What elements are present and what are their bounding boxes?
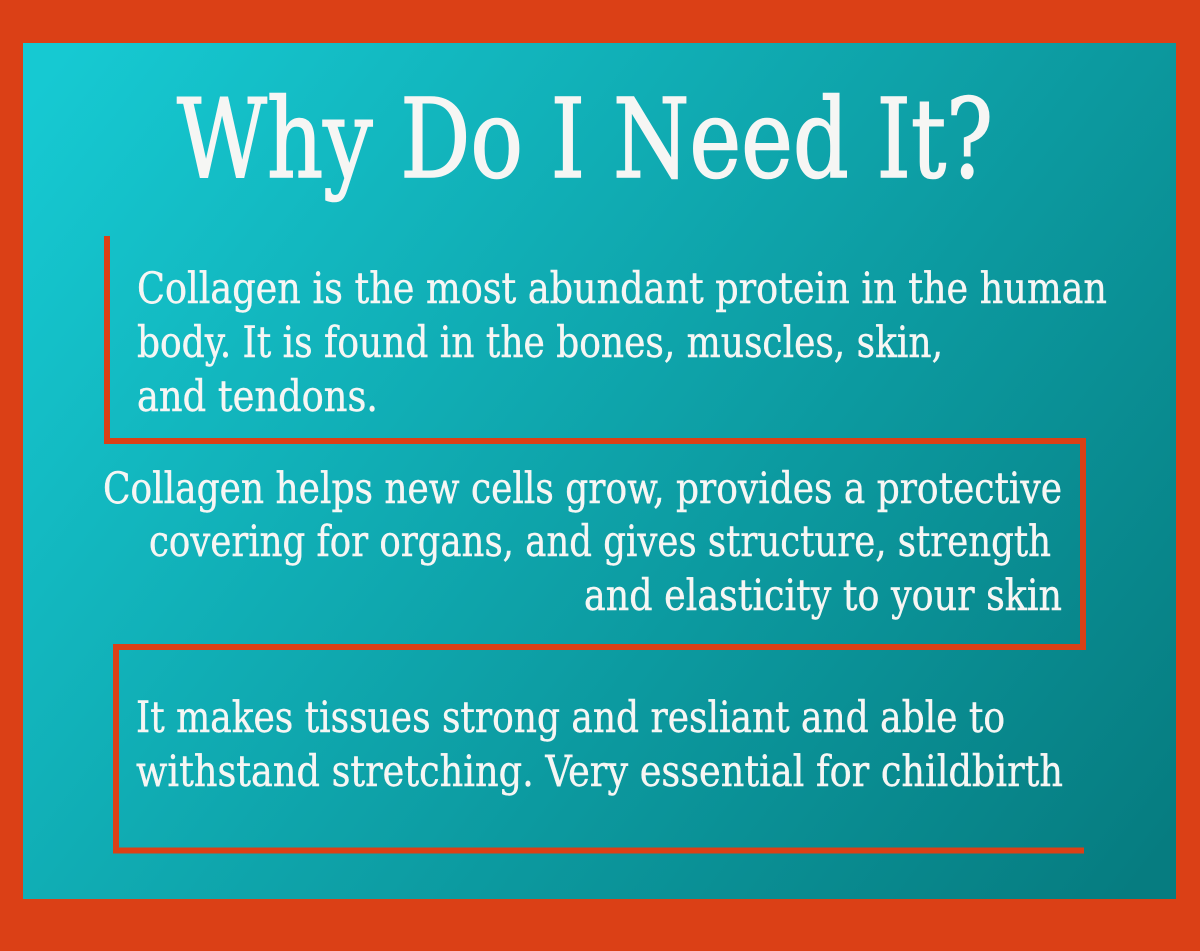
text block: collagen abundance: body. It is found in the bones, muscles, skin, [137,318,943,368]
text block: collagen abundance [137,264,1107,422]
text block: collagen abundance: Collagen is the most abundant protein in the human [137,264,1107,314]
text block: collagen functions [103,464,1062,621]
text block: tissue strength: withstand stretching. Very essential for childbirth [136,747,1063,797]
text block: collagen functions: Collagen helps new cells grow, provides a protective [103,464,1062,514]
text block: collagen functions: and elasticity to your skin [584,571,1062,621]
bracket line: third text block [116,644,1084,850]
text block: collagen abundance: and tendons. [137,372,378,422]
bracket line: first text block [107,236,1083,441]
text block: collagen functions: covering for organs, and gives structure, strength [149,517,1051,567]
text block: tissue strength: It makes tissues strong and resliant and able to [136,693,1005,743]
title: Why Do I Need It? [177,75,993,203]
text block: tissue strength [136,693,1063,797]
bracket line: second text block [113,438,1083,647]
